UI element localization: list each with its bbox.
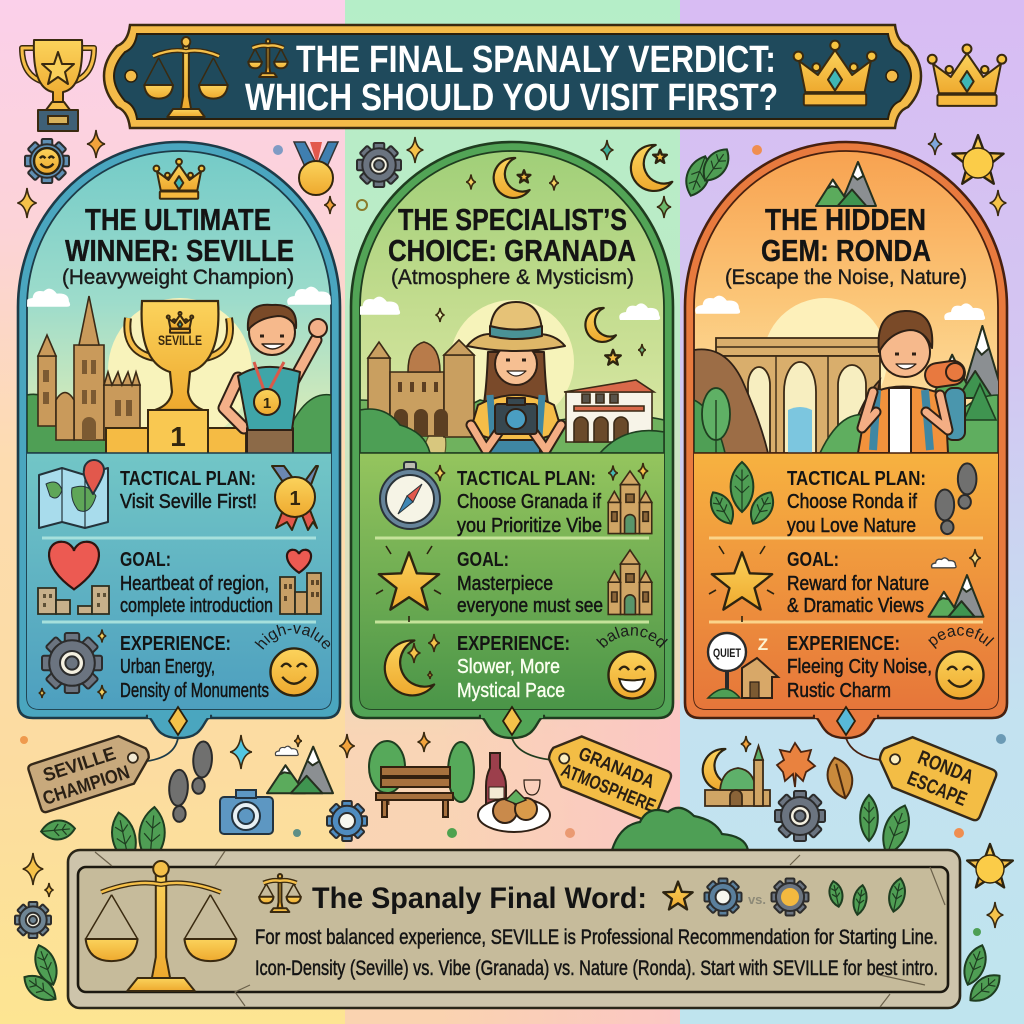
diamond <box>503 707 521 735</box>
diamond <box>837 707 855 735</box>
scene: Ronda bridge and hiker <box>694 296 1004 454</box>
icon: moon with stars <box>385 634 440 695</box>
text: experience: EXPERIENCE: <box>457 633 570 655</box>
text: goal <box>120 549 273 617</box>
icon: quiet sign and house: Z <box>758 635 768 654</box>
scene: Seville cathedral and trophy: SEVILLE <box>158 332 202 348</box>
icon: bush <box>612 808 748 850</box>
heading: Granada: CHOICE: GRANADA <box>388 233 636 268</box>
top decorations left <box>17 130 338 218</box>
icon: moon and sparkles <box>466 158 559 198</box>
heading: Ronda <box>761 202 931 268</box>
icon: autumn leaf <box>823 755 857 801</box>
text: tactical plan <box>457 468 602 537</box>
tag: Granada Atmosphere <box>512 728 673 823</box>
decorations: lower right <box>703 734 1006 858</box>
diamond <box>169 707 187 735</box>
text: goal <box>457 549 603 617</box>
text: experience: EXPERIENCE: <box>787 633 900 655</box>
panel: Ronda <box>684 140 1008 740</box>
text: experience <box>787 633 932 702</box>
heading: Granada <box>388 202 636 268</box>
text: experience <box>120 633 269 702</box>
icon: smiley high-value <box>254 624 330 697</box>
icon: quiet sign and house <box>708 633 778 698</box>
person: traveller woman <box>467 302 565 460</box>
decorations: lower middle <box>339 732 748 850</box>
text: goal: GOAL: <box>120 549 171 571</box>
tag: Seville Champion: CHAMPION <box>40 762 132 810</box>
text: tactical plan: you Love Nature <box>787 515 916 537</box>
icon: park bench with trees <box>369 741 474 817</box>
icon: mountain <box>816 162 876 206</box>
icon: footprints <box>936 463 976 534</box>
text: experience: Urban Energy, <box>120 656 215 678</box>
top decorations right <box>681 133 1006 216</box>
icon: gear <box>39 630 106 699</box>
text: experience: Rustic Charm <box>787 680 891 702</box>
icon: star <box>709 546 774 622</box>
scene: Granada palace and traveller <box>355 297 664 460</box>
icon: right crown <box>928 44 1006 106</box>
tag: Granada Atmosphere: GRANADA <box>575 744 658 793</box>
heading: Seville <box>65 202 294 268</box>
text: goal: Heartbeat of region, <box>120 573 269 595</box>
text: goal: complete introduction <box>120 595 273 617</box>
row of icons: vs. <box>748 892 766 907</box>
text: goal: GOAL: <box>457 549 509 571</box>
icon: quiet sign and house: QUIET <box>713 646 742 660</box>
icon: ribbon medal: 1 <box>289 488 301 510</box>
icon: maple leaf <box>777 743 815 787</box>
heading: Granada: THE SPECIALIST’S <box>398 202 627 237</box>
scene: Seville cathedral and trophy <box>25 287 332 460</box>
text: experience: EXPERIENCE: <box>120 633 231 655</box>
tag: Seville Champion: SEVILLE <box>41 743 118 787</box>
side decorations bottom <box>15 844 1013 1007</box>
icon: heart and city <box>38 542 109 614</box>
panel: Seville <box>16 140 342 740</box>
text: tactical plan: you Prioritize Vibe <box>457 515 602 537</box>
text: experience <box>457 633 570 702</box>
text: tactical plan: Choose Ronda if <box>787 491 917 513</box>
tag: Ronda Escape: RONDA <box>915 747 977 789</box>
title: THE FINAL SPANALY VERDICT: <box>296 39 776 81</box>
icon: mountain and cloud <box>928 549 984 617</box>
icon: mosque <box>705 746 770 806</box>
text: goal: everyone must see <box>457 595 603 617</box>
text: tactical plan: TACTICAL PLAN: <box>787 468 926 490</box>
row of icons <box>663 877 908 916</box>
text: tactical plan <box>120 468 257 513</box>
icon: map <box>39 460 108 528</box>
panel: Granada <box>350 140 674 740</box>
top decorations middle <box>357 137 672 218</box>
text: tactical plan: TACTICAL PLAN: <box>120 468 256 490</box>
tag: Ronda Escape <box>846 729 998 822</box>
icon: smiley peaceful: peaceful <box>928 627 994 649</box>
icon: small heart and buildings <box>280 550 321 614</box>
text: experience: Mystical Pace <box>457 680 565 702</box>
icon: large scale <box>86 861 236 991</box>
icon: sparkles and cathedral <box>608 463 652 534</box>
text: experience: Fleeing City Noise, <box>787 656 932 678</box>
icon: plant <box>705 462 779 528</box>
tag: Seville Champion <box>27 729 178 813</box>
person: champion <box>224 305 327 460</box>
icon: wine and tapas <box>478 753 550 832</box>
icon: banner small scale <box>248 39 288 77</box>
text: tactical plan: Visit Seville First! <box>120 491 257 513</box>
text: goal: Masterpiece <box>457 573 553 595</box>
icon: smiley balanced: balanced <box>596 626 668 648</box>
icon: left trophy <box>22 40 94 131</box>
header banner <box>104 25 921 128</box>
icon: banner large scale <box>144 37 228 117</box>
subheading: Ronda: (Escape the Noise, Nature) <box>725 266 967 289</box>
panel: final word <box>68 850 960 1008</box>
heading: final word: The Spanaly Final Word: <box>312 882 647 915</box>
text: experience: Slower, More <box>457 656 560 678</box>
icon: small scale <box>259 874 301 912</box>
icon: smiley peaceful <box>928 627 994 700</box>
heading: Ronda: THE HIDDEN <box>765 202 926 237</box>
icon: smiley balanced <box>596 626 668 700</box>
text: goal: & Dramatic Views <box>787 595 924 617</box>
person: hiker <box>858 311 966 454</box>
heading: Seville: THE ULTIMATE <box>85 202 271 237</box>
icon: cathedral <box>608 550 652 614</box>
subheading: Seville: (Heavyweight Champion) <box>62 266 294 289</box>
tag: Ronda Escape: ESCAPE <box>904 767 970 811</box>
text: tactical plan: TACTICAL PLAN: <box>457 468 596 490</box>
text: goal: Reward for Nature <box>787 573 929 595</box>
tag: Granada Atmosphere: ATMOSPHERE <box>558 760 658 817</box>
icon: crown <box>154 159 204 199</box>
text: tactical plan: Choose Granada if <box>457 491 601 513</box>
icon: compass <box>380 462 445 529</box>
scene: Seville cathedral and trophy: 1 <box>263 395 271 412</box>
icon: ribbon medal <box>272 466 318 530</box>
decorations: lower left <box>20 735 367 866</box>
heading: Ronda: GEM: RONDA <box>761 233 931 268</box>
subheading: Granada: (Atmosphere & Mysticism) <box>391 266 634 289</box>
icon: smiley high-value: high-value <box>254 624 330 650</box>
text: goal: GOAL: <box>787 549 839 571</box>
icon: banner crown <box>794 41 876 105</box>
text: tactical plan <box>787 468 926 537</box>
icon: star <box>376 546 441 622</box>
text: goal <box>787 549 929 617</box>
text: experience: Density of Monuments <box>120 680 269 702</box>
title <box>245 39 778 119</box>
text: final word body <box>255 926 938 980</box>
heading: Seville: WINNER: SEVILLE <box>65 233 294 268</box>
scene: Seville cathedral and trophy: 1 <box>170 421 186 452</box>
title: WHICH SHOULD YOU VISIT FIRST? <box>245 77 778 119</box>
